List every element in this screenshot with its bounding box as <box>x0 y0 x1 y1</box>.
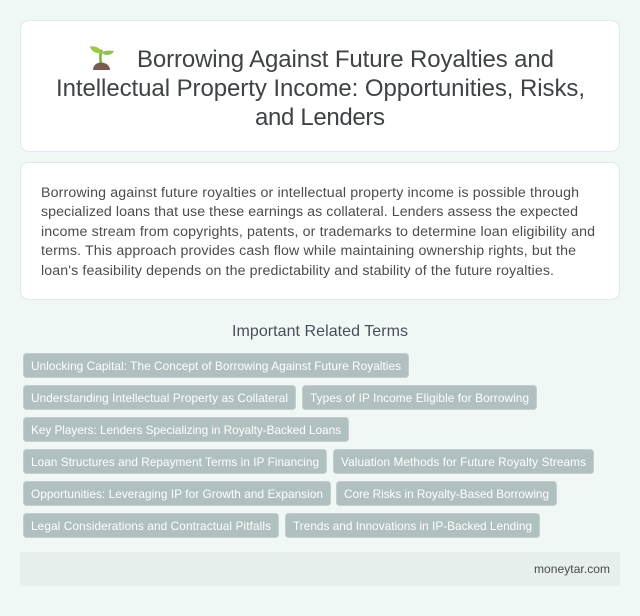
heading: related terms: Important Related Terms <box>232 323 408 340</box>
title text <box>56 46 585 131</box>
tag <box>24 354 408 378</box>
tag: Types of IP Income Eligible for Borrowing <box>310 391 529 405</box>
panel: title <box>20 20 620 152</box>
panel: summary paragraph: Borrowing against future royalties or intellectual property income is possible through <box>41 185 579 201</box>
footer: moneytar.com <box>534 562 610 576</box>
tag: Trends and Innovations in IP-Backed Lending <box>293 519 532 533</box>
tag: Valuation Methods for Future Royalty Streams <box>341 455 586 469</box>
tag <box>24 418 348 442</box>
tag: Unlocking Capital: The Concept of Borrowing Against Future Royalties <box>31 359 401 373</box>
icon: seedling <box>90 46 114 70</box>
tag: Key Players: Lenders Specializing in Royalty-Backed Loans <box>31 423 341 437</box>
tag: Loan Structures and Repayment Terms in IP Financing <box>31 455 319 469</box>
panel: summary paragraph: loan's feasibility depends on the predictability and stability of the future royalties. <box>41 263 554 279</box>
tag <box>336 482 556 506</box>
tag <box>334 450 594 474</box>
tag: Core Risks in Royalty-Based Borrowing <box>344 487 549 501</box>
tag <box>24 514 278 538</box>
panel: summary paragraph: specialized loans that use these earnings as collateral. Lenders assess the expected <box>41 204 578 220</box>
tag <box>24 450 326 474</box>
tag: Understanding Intellectual Property as Collateral <box>31 391 288 405</box>
title text: Intellectual Property Income: Opportunities, Risks, <box>56 75 585 102</box>
panel: summary paragraph: terms. This approach provides cash flow while maintaining ownership rights, but the <box>41 243 576 259</box>
tag: Legal Considerations and Contractual Pitfalls <box>31 519 271 533</box>
tag <box>24 482 330 506</box>
tag <box>286 514 540 538</box>
title text: and Lenders <box>255 104 385 131</box>
title text: Borrowing Against Future Royalties and <box>137 46 554 73</box>
panel: summary paragraph <box>20 162 620 300</box>
panel: summary paragraph: income stream from copyrights, patents, or trademarks to determine loan eligibility and <box>41 224 595 240</box>
tag: Opportunities: Leveraging IP for Growth and Expansion <box>31 487 323 501</box>
tag list <box>24 354 594 538</box>
tag <box>302 386 536 410</box>
footer <box>20 552 620 586</box>
tag <box>24 386 296 410</box>
